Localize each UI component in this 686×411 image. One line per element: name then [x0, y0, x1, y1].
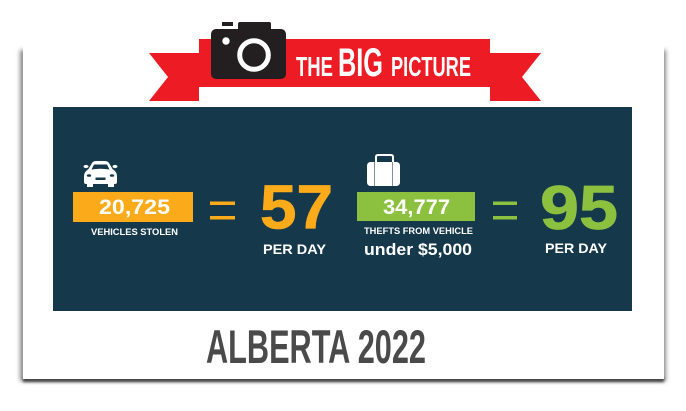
banner title: big: BIG: [338, 41, 383, 85]
label second line: under $5,000: [364, 241, 472, 259]
label: VEHICLES STOLEN: [91, 227, 178, 237]
stat: vehicles stolen: [73, 161, 333, 257]
value: 20,725: [99, 196, 170, 219]
big number: 57: [260, 174, 333, 242]
panel: dark statistics background: [53, 107, 632, 311]
footer title: ALBERTA 2022: [206, 321, 426, 374]
ribbon right tail: [490, 53, 541, 101]
stat: thefts from vehicle: [357, 155, 618, 259]
per day: PER DAY: [545, 240, 608, 256]
big number: 95: [540, 174, 618, 243]
per day: PER DAY: [263, 241, 327, 257]
banner title: the: THE: [296, 51, 333, 82]
equals sign: [210, 202, 235, 220]
label: THEFTS FROM VEHICLE: [364, 226, 473, 236]
banner title: picture: PICTURE: [391, 51, 471, 82]
banner: the big picture ribbon: [149, 22, 541, 101]
value: 34,777: [383, 196, 450, 219]
ribbon centre band: [199, 39, 490, 87]
equals sign: [493, 202, 517, 220]
card: white frame with shadow: [20, 40, 666, 382]
green value bar: [357, 192, 475, 221]
icon: camera: [211, 22, 286, 79]
icon: suitcase: [367, 155, 400, 186]
ribbon left tail: [149, 53, 199, 101]
orange value bar: [73, 192, 193, 222]
icon: car: [84, 161, 118, 187]
